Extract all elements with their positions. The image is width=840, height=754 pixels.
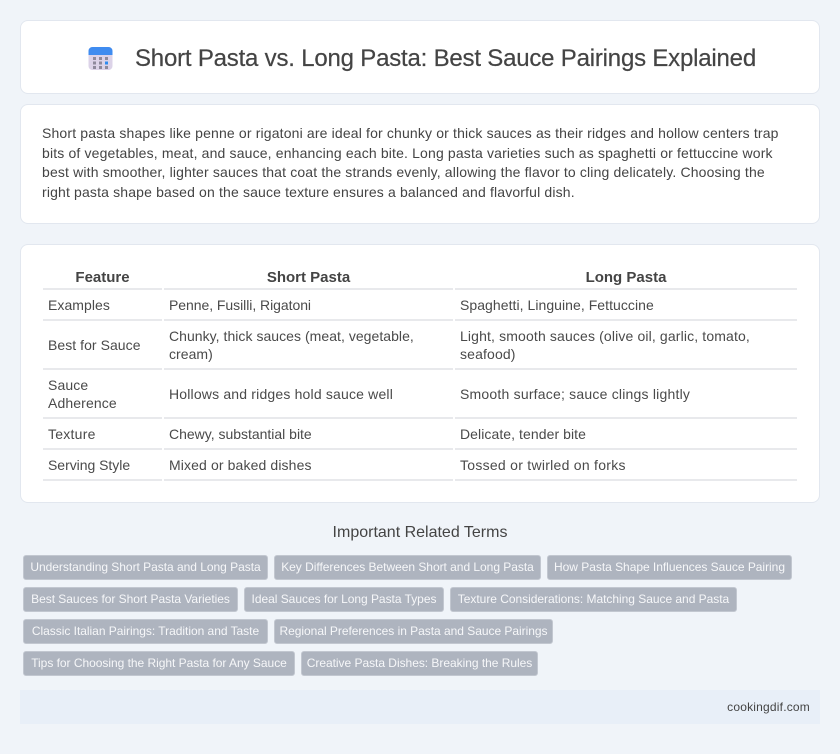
- related terms tags: [23, 555, 792, 676]
- row: texture: Delicate, tender bite: [460, 426, 586, 442]
- row: examples: [48, 297, 654, 313]
- tag: Ideal Sauces for Long Pasta Types: [252, 592, 436, 606]
- row: best for sauce: cream): [169, 346, 213, 362]
- panel: intro text: [20, 104, 820, 224]
- tag: [23, 619, 268, 644]
- row: sauce adherence: Adherence: [48, 395, 117, 411]
- heading: related terms: Important Related Terms: [333, 524, 507, 541]
- tag: [274, 619, 553, 644]
- row: best for sauce: Chunky, thick sauces (meat, vegetable,: [169, 328, 414, 344]
- tag: How Pasta Shape Influences Sauce Pairing: [554, 560, 785, 574]
- row: serving style: [48, 457, 626, 473]
- row: best for sauce: seafood): [460, 346, 516, 362]
- table header: Long Pasta: [586, 269, 666, 286]
- row: texture: Texture: [48, 426, 96, 442]
- tag: [301, 651, 538, 676]
- table header: [75, 269, 667, 286]
- tag: Tips for Choosing the Right Pasta for Any Sauce: [31, 656, 287, 670]
- row: sauce adherence: Smooth surface; sauce clings lightly: [460, 386, 690, 402]
- row: examples: Spaghetti, Linguine, Fettuccine: [460, 297, 654, 313]
- icon: calendar: [88, 47, 112, 70]
- tag: [23, 651, 295, 676]
- row: texture: Chewy, substantial bite: [169, 426, 312, 442]
- tag: Creative Pasta Dishes: Breaking the Rules: [307, 656, 532, 670]
- row: serving style: Mixed or baked dishes: [169, 457, 312, 473]
- intro paragraph: right pasta shape based on the sauce texture ensures a balanced and flavorful dish.: [42, 184, 575, 200]
- intro paragraph: [42, 125, 779, 200]
- intro paragraph: best with smoother, lighter sauces that coat the strands evenly, allowing the flavor to cling delicately. Choosing the: [42, 164, 765, 180]
- panel: title card: [20, 20, 820, 94]
- tag: Regional Preferences in Pasta and Sauce Pairings: [279, 624, 548, 638]
- row: examples: Penne, Fusilli, Rigatoni: [169, 297, 311, 313]
- row: sauce adherence: Sauce: [48, 377, 88, 393]
- tag: [244, 587, 444, 612]
- title: Short Pasta vs. Long Pasta: Best Sauce Pairings Explained: [135, 45, 756, 72]
- footer source text: cookingdif.com: [727, 700, 810, 714]
- row: sauce adherence: [48, 377, 690, 411]
- tag: Classic Italian Pairings: Tradition and Taste: [32, 624, 259, 638]
- table header: Feature: [75, 269, 130, 286]
- tag: [547, 555, 792, 580]
- tag: [23, 587, 238, 612]
- tag: Key Differences Between Short and Long Pasta: [281, 560, 534, 574]
- tag: [450, 587, 737, 612]
- intro paragraph: bits of vegetables, meat, and sauce, enhancing each bite. Long pasta varieties such as spaghetti or fettuccine work: [42, 144, 773, 160]
- row: best for sauce: Light, smooth sauces (olive oil, garlic, tomato,: [460, 328, 750, 344]
- table header: Short Pasta: [267, 269, 350, 286]
- row: best for sauce: Best for Sauce: [48, 337, 141, 353]
- intro paragraph: Short pasta shapes like penne or rigatoni are ideal for chunky or thick sauces as their ridges and hollow centers trap: [42, 125, 779, 141]
- panel: comparison table: [20, 244, 820, 503]
- row: examples: Examples: [48, 297, 110, 313]
- row: serving style: Serving Style: [48, 457, 130, 473]
- row: texture: [48, 426, 586, 442]
- tag: Texture Considerations: Matching Sauce and Pasta: [458, 592, 729, 606]
- row: best for sauce: [48, 328, 750, 362]
- tag: Understanding Short Pasta and Long Pasta: [30, 560, 261, 574]
- tag: [23, 555, 268, 580]
- tag: Best Sauces for Short Pasta Varieties: [31, 592, 230, 606]
- footer bar: [20, 690, 820, 724]
- tag: [274, 555, 541, 580]
- row: serving style: Tossed or twirled on forks: [460, 457, 626, 473]
- row: sauce adherence: Hollows and ridges hold sauce well: [169, 386, 393, 402]
